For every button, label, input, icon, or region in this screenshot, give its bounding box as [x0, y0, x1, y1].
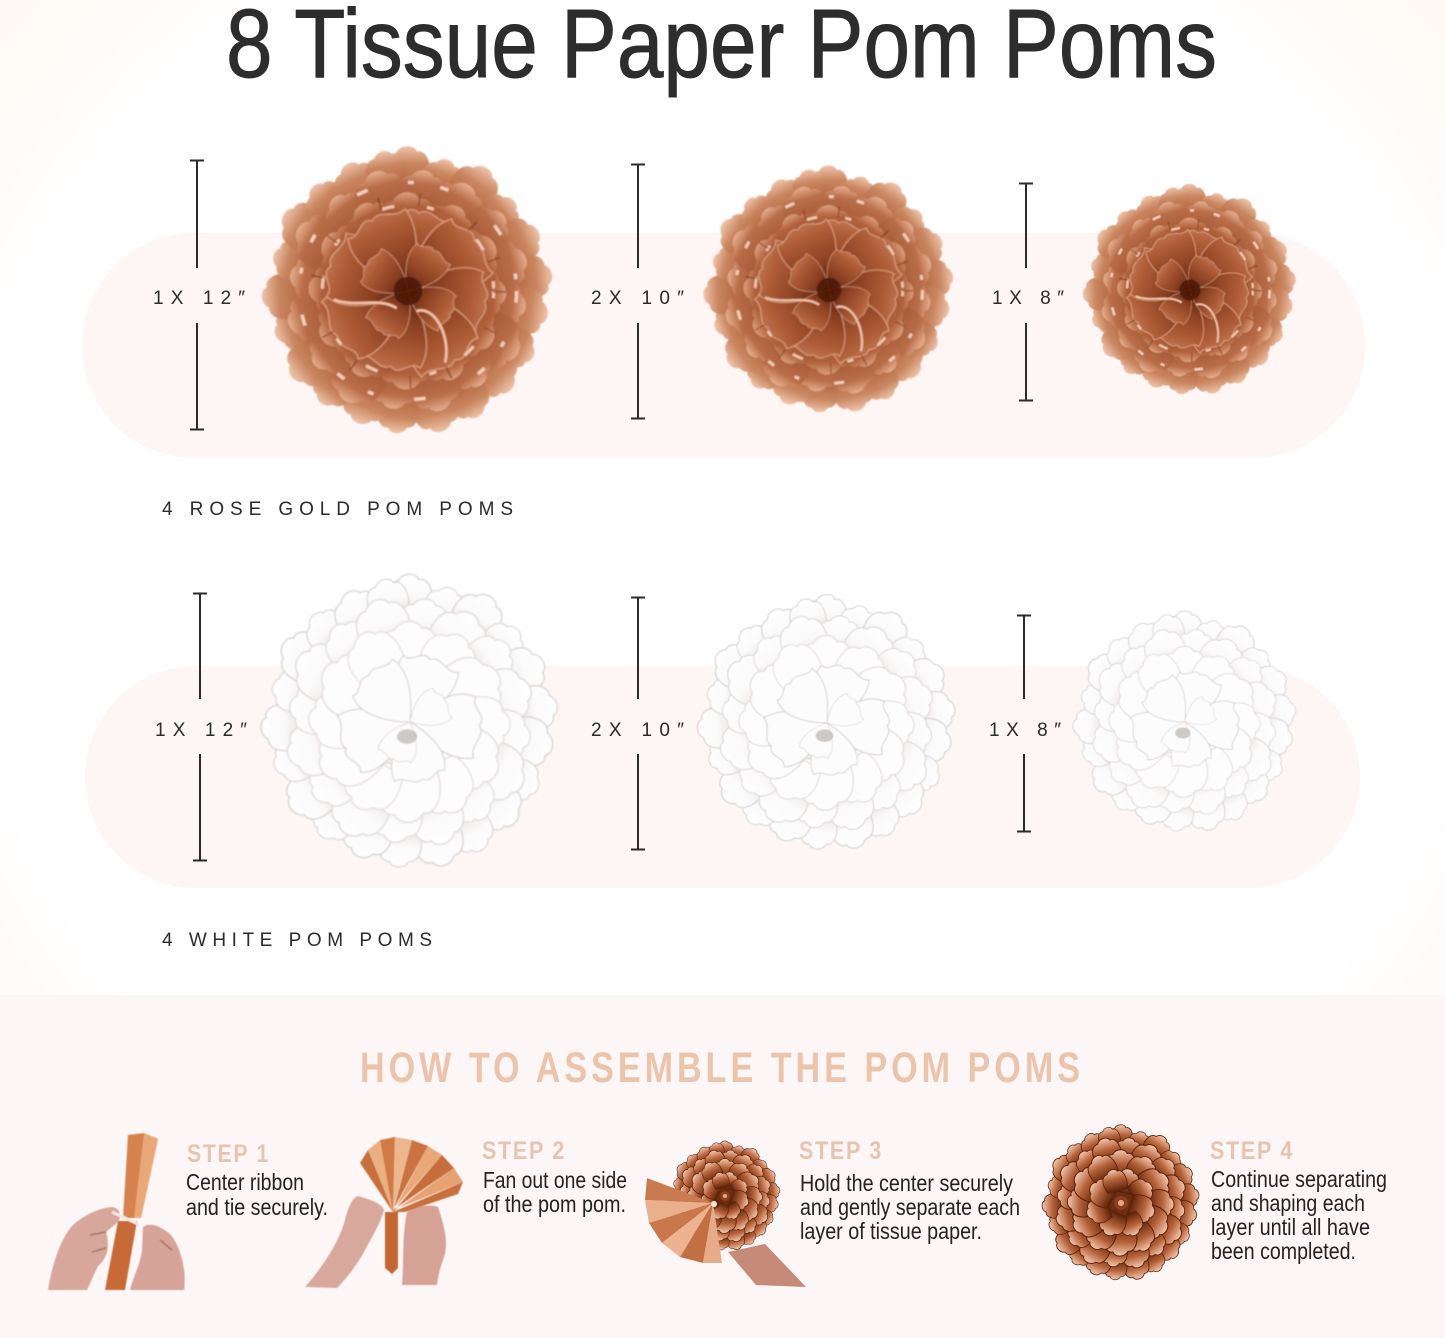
step 3 text: Hold the center securely: [800, 1170, 1013, 1196]
assembly background: [0, 995, 1445, 1338]
measure: 1x 8 inch white: [989, 615, 1061, 832]
step 2 label: STEP 2: [482, 1137, 566, 1165]
panel: white pom poms: [85, 574, 1360, 951]
measure: 1x 8 inch rose: [992, 183, 1064, 400]
step 3 text: and gently separate each: [800, 1194, 1020, 1220]
step 4 text: and shaping each: [1211, 1190, 1365, 1216]
illustration: hands tying ribbon: [48, 1133, 185, 1290]
step 3 label: STEP 3: [799, 1137, 883, 1165]
step 4: [1042, 1125, 1387, 1282]
background pill: white row: [85, 666, 1360, 888]
measure: 1x 12 inch rose: [153, 160, 245, 430]
step 3: [645, 1137, 1020, 1287]
heading: how to assemble: HOW TO ASSEMBLE THE POM POMS: [360, 1044, 1084, 1092]
measure: 1x 12 inch white: 1X 12″: [155, 720, 247, 741]
measure: 1x 12 inch rose: 1X 12″: [153, 288, 245, 309]
measure: 1x 8 inch white: 1X 8″: [989, 720, 1061, 741]
illustration: finished pom pom: [1042, 1125, 1200, 1282]
pom pom: 12 inch white: [260, 574, 560, 871]
measure: 2x 10 inch rose: [591, 164, 684, 418]
step 2 text: Fan out one side: [483, 1167, 627, 1193]
pom pom: 10 inch white: [697, 595, 957, 853]
illustration: separating layers: [645, 1141, 806, 1287]
step 4 text: been completed.: [1211, 1238, 1356, 1264]
step 4 text: layer until all have: [1211, 1214, 1370, 1240]
pom pom: 12 inch rose gold: [261, 146, 555, 437]
step 1 text: and tie securely.: [186, 1194, 328, 1220]
measure: 1x 12 inch white: [155, 593, 247, 860]
label: white count: 4 WHITE POM POMS: [162, 930, 432, 951]
illustration: fanning one side: [305, 1137, 463, 1288]
label: rose gold count: 4 ROSE GOLD POM POMS: [162, 499, 513, 520]
background pill: rose gold row: [82, 233, 1365, 458]
step 2: [305, 1137, 627, 1288]
measure: 2x 10 inch white: [591, 597, 684, 850]
pom pom: 10 inch rose gold: [703, 165, 955, 416]
step 1 text: Center ribbon: [186, 1169, 304, 1195]
measure: 2x 10 inch white: 2X 10″: [591, 720, 684, 741]
step 1 label: STEP 1: [187, 1140, 270, 1168]
measure: 2x 10 inch rose: 2X 10″: [591, 288, 684, 309]
step 4 text: Continue separating: [1211, 1166, 1387, 1192]
step 3 text: layer of tissue paper.: [800, 1218, 982, 1244]
step 1: [48, 1133, 328, 1290]
measure: 1x 8 inch rose: 1X 8″: [992, 288, 1064, 309]
pom pom: 8 inch rose gold: [1082, 184, 1298, 397]
step 4 label: STEP 4: [1210, 1137, 1294, 1165]
panel: how to assemble: [0, 995, 1445, 1338]
panel: rose gold pom poms: [82, 146, 1365, 520]
step 2 text: of the pom pom.: [483, 1191, 626, 1217]
pom pom: 8 inch white: [1072, 611, 1297, 834]
